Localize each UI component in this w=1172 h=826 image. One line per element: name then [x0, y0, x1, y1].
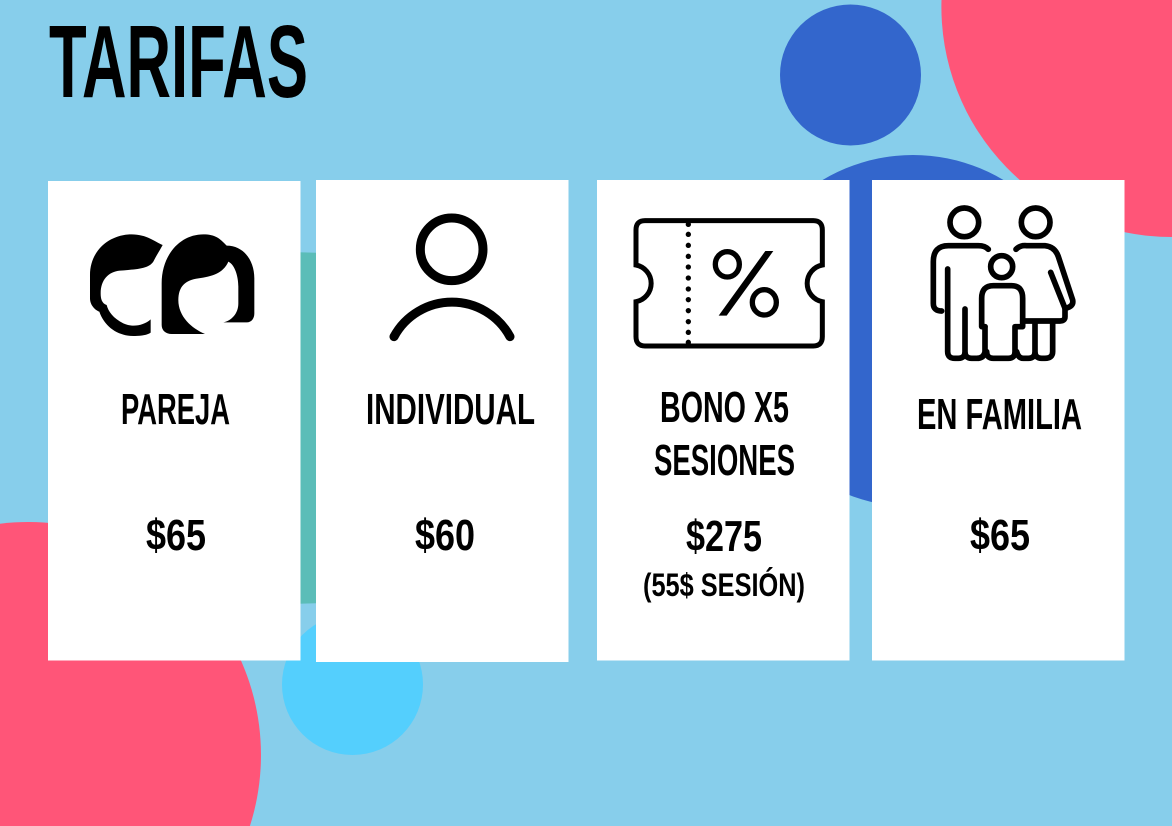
background circle: dark blue head: [780, 4, 921, 146]
panel: familia: [872, 180, 1124, 660]
background circle: dark blue body: [737, 155, 1089, 507]
panel: bono: [597, 180, 850, 660]
price: individual: $60: [415, 511, 475, 560]
panel: pareja: [48, 181, 300, 660]
label: pareja: PAREJA: [121, 385, 230, 434]
card background: familia: [872, 180, 1124, 660]
card background: pareja: [48, 181, 300, 660]
icon: family: [933, 208, 1073, 358]
price: pareja: $65: [146, 511, 206, 560]
card background: bono: [597, 180, 850, 660]
panel: individual: [316, 180, 568, 662]
price: familia: $65: [970, 511, 1030, 560]
icon: discount ticket: [636, 221, 822, 346]
label: bono x5 sesiones: SESIONES: [654, 436, 795, 485]
icon: person: [394, 218, 510, 337]
card background: individual: [316, 180, 568, 662]
price note: per session: (55$ SESIÓN): [643, 567, 805, 603]
background shape: teal band: [290, 252, 325, 604]
background shape: pink top right: [941, 0, 1172, 237]
label: bono x5 sesiones: [654, 383, 795, 485]
title: TARIFAS: [49, 4, 308, 119]
background circle: light blue: [282, 614, 423, 755]
label: bono x5 sesiones: BONO X5: [660, 383, 789, 432]
price: bono: $275: [686, 512, 762, 561]
icon: couple hair: [90, 234, 254, 336]
background shape: pink bottom left: [0, 522, 261, 826]
label: individual: INDIVIDUAL: [366, 385, 535, 434]
label: en familia: EN FAMILIA: [917, 390, 1082, 439]
